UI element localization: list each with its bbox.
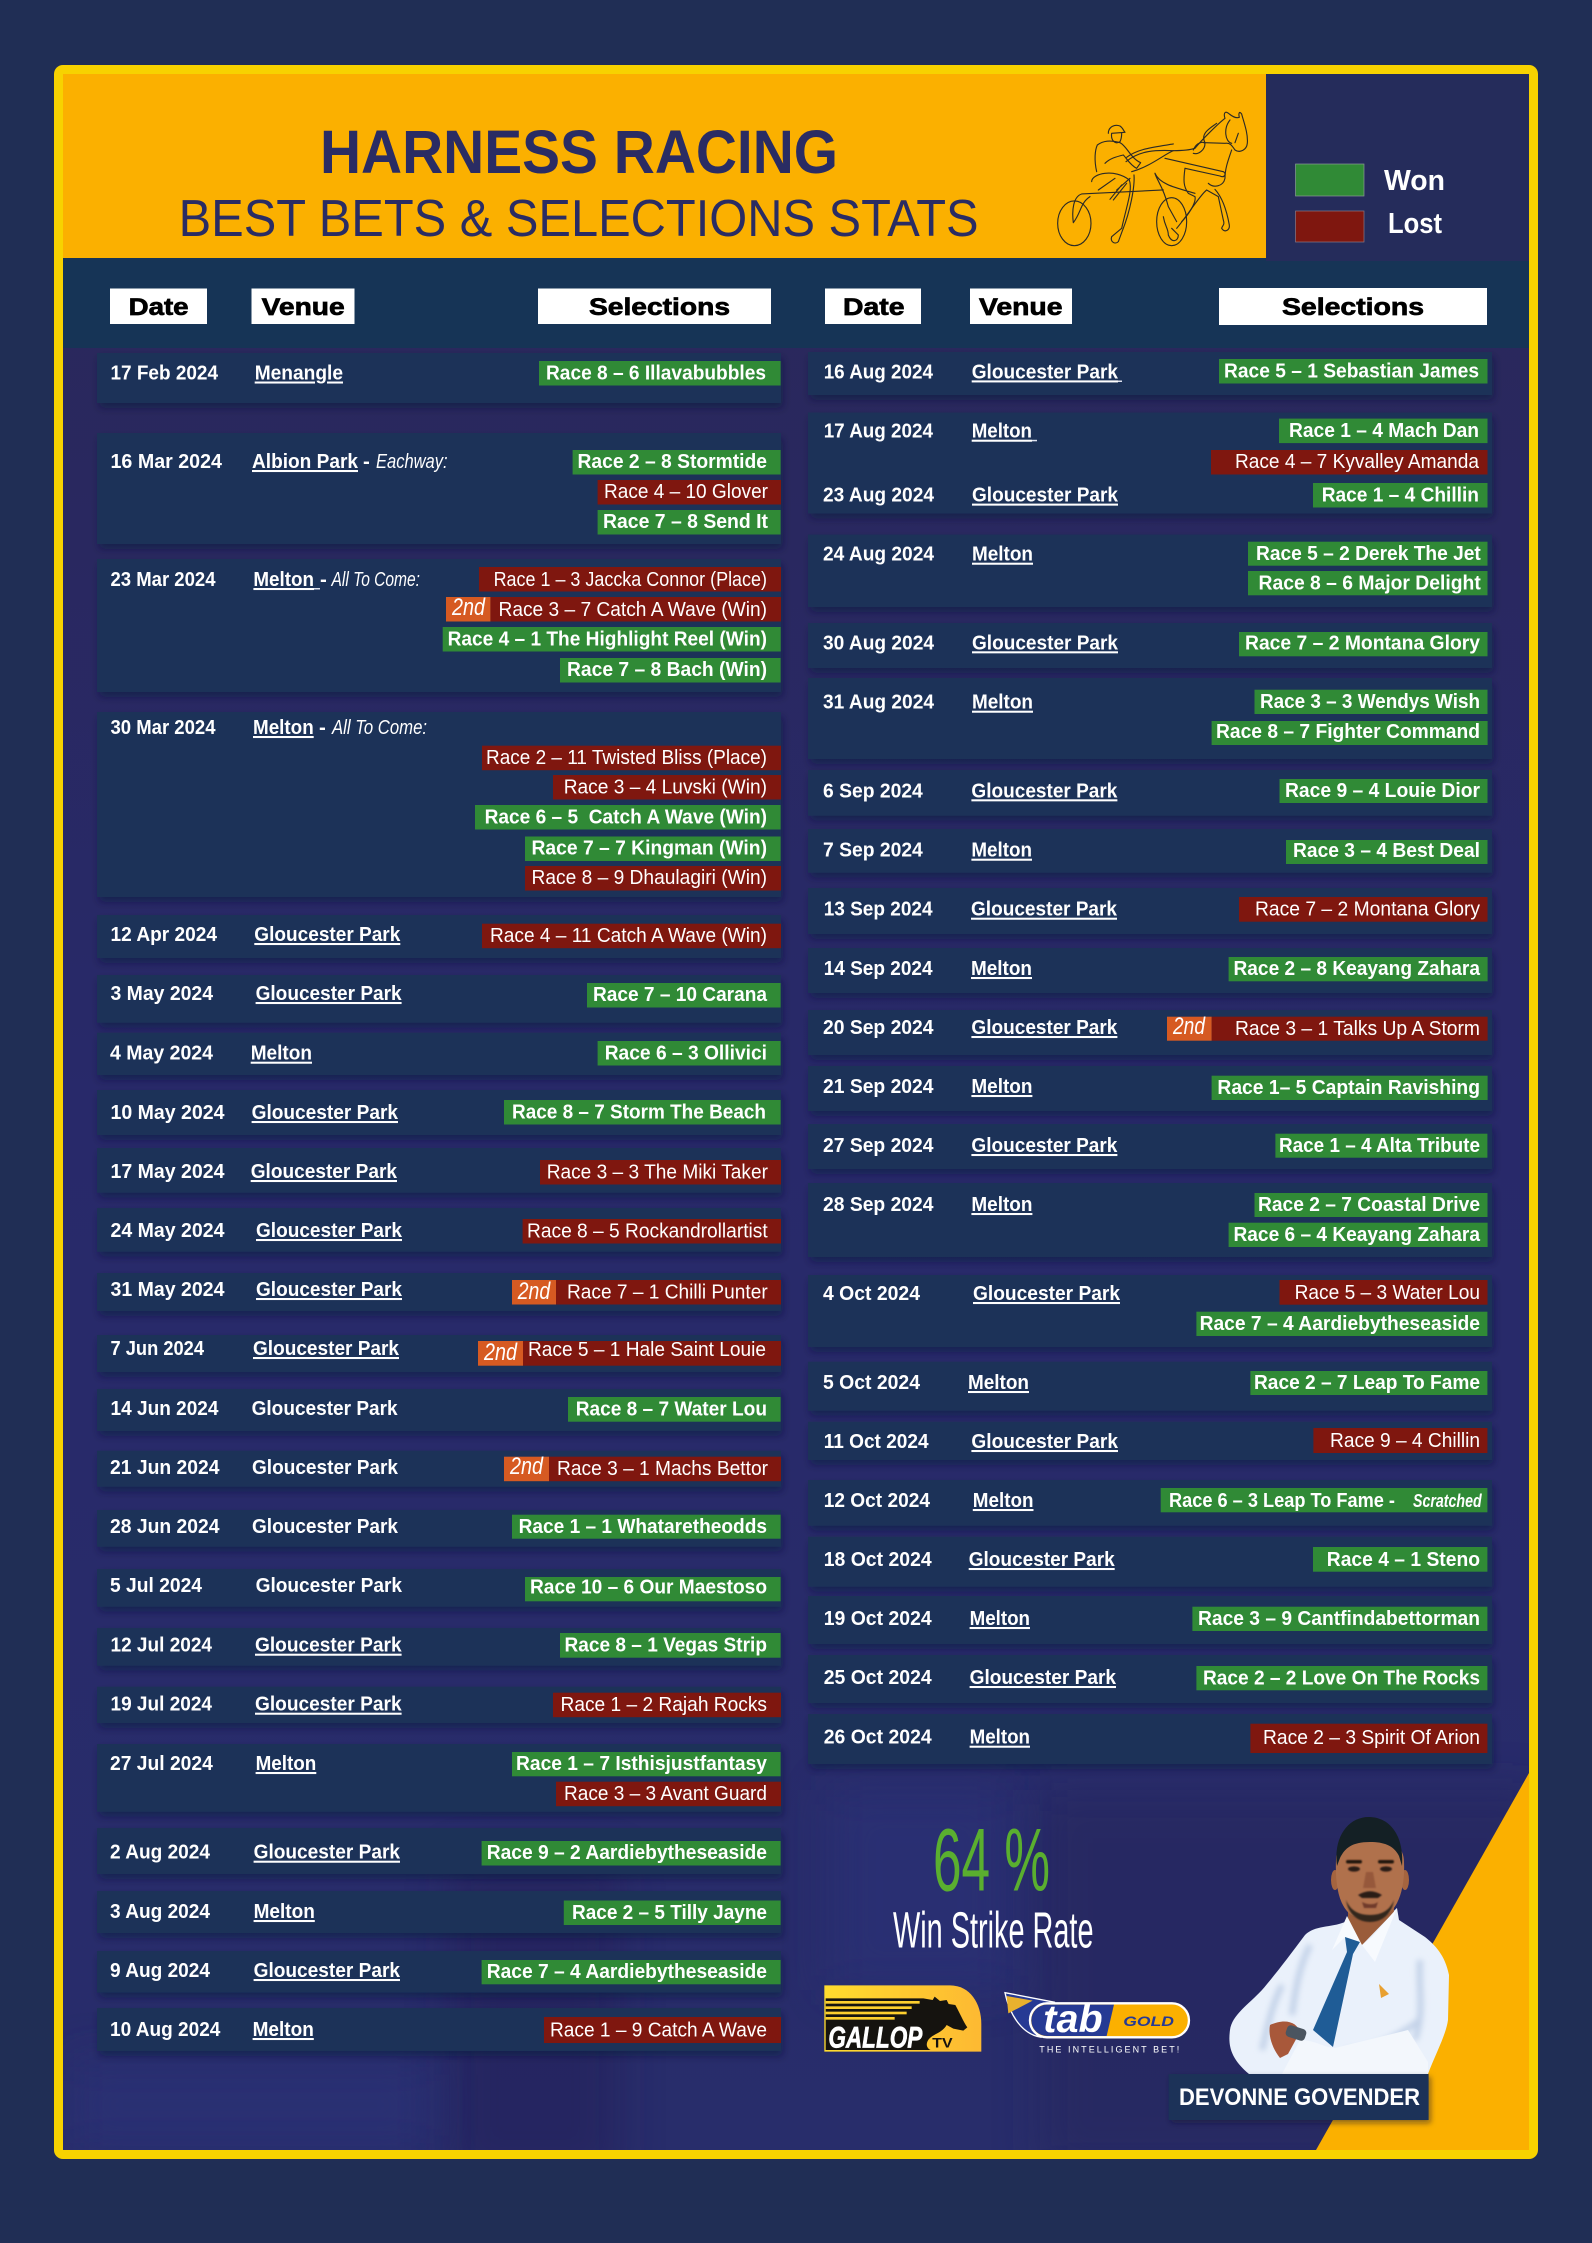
row: 31 Aug 2024 <box>808 678 1492 759</box>
row: 5 Oct 2024 <box>808 1362 1492 1411</box>
yellow corner wedge <box>1316 1773 1529 2150</box>
selection won: Race 8 – 7 Water Lou <box>576 1398 767 1420</box>
selection lost, 2nd: 2nd <box>451 594 486 621</box>
selection won: Race 7 – 8 Bach (Win) <box>567 658 767 681</box>
date: 13 Sep 2024 <box>824 898 933 921</box>
row: 17 May 2024 <box>97 1148 781 1193</box>
selection lost: Race 1 – 2 Rajah Rocks <box>560 1693 767 1716</box>
venue: Albion Park <box>252 450 359 473</box>
selection lost, 2nd <box>504 1453 781 1481</box>
venue: Melton <box>972 420 1032 443</box>
venue: Gloucester Park <box>971 779 1118 802</box>
row: 24 Aug 2024 <box>808 535 1492 607</box>
date: 27 Jul 2024 <box>110 1752 213 1775</box>
ears <box>1331 1870 1409 1890</box>
face <box>1336 1838 1404 1919</box>
row: 28 Jun 2024 <box>97 1510 781 1547</box>
selection won: Race 8 – 1 Vegas Strip <box>564 1634 767 1656</box>
selection won: Race 1– 5 Captain Ravishing <box>1217 1076 1480 1099</box>
row: 26 Oct 2024 <box>808 1714 1492 1764</box>
date: 28 Sep 2024 <box>823 1193 934 1216</box>
venue: Gloucester Park <box>972 360 1119 383</box>
logo: Gallop TV: TV <box>932 2034 953 2050</box>
date: 10 Aug 2024 <box>110 2018 221 2041</box>
selection won: Race 7 – 2 Montana Glory <box>1245 632 1481 654</box>
date: 28 Jun 2024 <box>110 1515 220 1538</box>
neck <box>1348 1898 1394 1945</box>
selection lost, 2nd: Race 3 – 7 Catch A Wave (Win) <box>498 598 767 621</box>
legend panel <box>1266 74 1529 260</box>
header: selections: Selections <box>589 294 730 321</box>
venue: Melton <box>253 716 314 739</box>
selection won: Race 2 – 7 Coastal Drive <box>1258 1193 1480 1216</box>
date: 12 Apr 2024 <box>110 923 218 946</box>
venue: Gloucester Park <box>254 1841 401 1864</box>
venue: All To Come: <box>330 716 427 739</box>
venue: Melton <box>968 1371 1029 1394</box>
row: 12 Oct 2024 <box>808 1480 1492 1526</box>
venue <box>253 716 427 739</box>
tie <box>1313 1937 1360 2047</box>
row: 3 May 2024 <box>97 975 781 1023</box>
header: date <box>110 288 207 324</box>
selection won: Race 2 – 7 Leap To Fame <box>1254 1371 1480 1394</box>
logo: TAB Gold: GOLD <box>1123 2013 1174 2029</box>
name plate: DEVONNE GOVENDER <box>1179 2084 1420 2111</box>
venue: Gloucester Park <box>256 1278 403 1301</box>
venue: Melton <box>971 1193 1032 1216</box>
selection won: Race 7 – 7 Kingman (Win) <box>532 836 767 860</box>
selection won: Race 1 – 1 Whataretheodds <box>519 1515 767 1538</box>
row: 27 Sep 2024 <box>808 1124 1492 1169</box>
row: 14 Jun 2024 <box>97 1389 781 1431</box>
venue: Gloucester Park <box>252 1397 398 1420</box>
selection lost, 2nd: Race 3 – 1 Talks Up A Storm <box>1235 1017 1480 1040</box>
row: 7 Jun 2024 <box>97 1335 781 1372</box>
date: 23 Aug 2024 <box>823 484 935 507</box>
venue: Gloucester Park <box>256 982 402 1005</box>
selection lost: Race 4 – 7 Kyvalley Amanda <box>1235 450 1480 473</box>
selection lost, 2nd <box>512 1278 781 1305</box>
row: 27 Jul 2024 <box>97 1744 781 1812</box>
selection lost, 2nd: Race 7 – 1 Chilli Punter <box>567 1280 768 1304</box>
selection lost: Race 4 – 11 Catch A Wave (Win) <box>490 924 767 947</box>
shirt folds <box>1262 1945 1421 2052</box>
header: selections right <box>1219 288 1487 325</box>
venue: Gloucester Park <box>971 1016 1118 1039</box>
portrait: Devonne Govender <box>1229 1817 1449 2074</box>
big percentage: 64 % <box>933 1810 1050 1910</box>
venue: Melton <box>254 1900 315 1923</box>
selection won: Race 1 – 7 Isthisjustfantasy <box>516 1752 768 1775</box>
row: 7 Sep 2024 <box>808 829 1492 873</box>
venue: Gloucester Park <box>252 1456 399 1479</box>
selection lost, 2nd: 2nd <box>517 1278 551 1305</box>
selection lost: Race 1 – 9 Catch A Wave <box>550 2018 767 2042</box>
row: 21 Sep 2024 <box>808 1066 1492 1111</box>
selection won: Race 1 – 4 Chillin <box>1322 484 1479 506</box>
selection won: Race 4 – 1 The Highlight Reel (Win) <box>448 628 767 650</box>
row: 17 Feb 2024 <box>97 353 781 403</box>
venue <box>252 450 448 473</box>
logo: Gallop TV <box>824 1985 981 2055</box>
venue: Gloucester Park <box>256 1219 403 1242</box>
row: 19 Jul 2024 <box>97 1687 781 1723</box>
date: 30 Aug 2024 <box>823 631 935 654</box>
row: 30 Mar 2024 <box>97 712 781 897</box>
row: 10 May 2024 <box>97 1090 781 1135</box>
logo: TAB Gold: THE INTELLIGENT BET! <box>1039 2045 1179 2055</box>
selection won: Race 10 – 6 Our Maestoso <box>530 1576 767 1598</box>
logo: Gallop TV: GALLOP <box>828 2022 923 2055</box>
selection won: Race 7 – 4 Aardiebytheseaside <box>1200 1312 1480 1335</box>
selection won: Race 7 – 8 Send It <box>603 510 768 533</box>
row: 12 Jul 2024 <box>97 1628 781 1666</box>
column header band <box>63 258 1529 348</box>
venue: Gloucester Park <box>973 1282 1121 1305</box>
date: 7 Jun 2024 <box>110 1337 205 1360</box>
venue: Gloucester Park <box>255 1693 402 1716</box>
features <box>1346 1860 1394 1922</box>
selection lost, 2nd: 2nd <box>509 1453 544 1480</box>
row: 4 Oct 2024 <box>808 1275 1492 1347</box>
selection won: Race 8 – 7 Storm The Beach <box>512 1100 766 1124</box>
venue: Gloucester Park <box>253 1337 400 1360</box>
header: venue right <box>970 288 1072 324</box>
row: 23 Mar 2024 <box>97 559 781 692</box>
selection lost, 2nd: 2nd <box>1172 1013 1206 1040</box>
selection lost: Race 8 – 9 Dhaulagiri (Win) <box>532 866 767 889</box>
venue <box>253 568 420 591</box>
selection won: Race 9 – 2 Aardiebytheseaside <box>487 1841 767 1864</box>
venue: Melton <box>253 2018 314 2041</box>
selection lost: Race 7 – 2 Montana Glory <box>1255 898 1481 920</box>
selection won, scratched: Race 6 – 3 Leap To Fame - <box>1169 1489 1395 1512</box>
row: 13 Sep 2024 <box>808 888 1492 934</box>
date: 31 May 2024 <box>110 1278 225 1301</box>
venue: Melton <box>971 839 1032 862</box>
watch <box>1285 2024 1307 2042</box>
date: 21 Jun 2024 <box>110 1456 220 1479</box>
selection won: Race 5 – 1 Sebastian James <box>1224 360 1479 382</box>
date: 12 Jul 2024 <box>110 1634 213 1657</box>
selection won, scratched: Scratched <box>1413 1491 1482 1511</box>
selection lost: Race 8 – 5 Rockandrollartist <box>527 1220 768 1242</box>
date: 14 Jun 2024 <box>110 1397 219 1420</box>
row: 2 Aug 2024 <box>97 1828 781 1874</box>
venue: Gloucester Park <box>252 1101 399 1124</box>
venue: Melton <box>970 1607 1030 1630</box>
selection lost: Race 1 – 3 Jaccka Connor (Place) <box>494 568 767 591</box>
selection won: Race 3 – 9 Cantfindabettorman <box>1198 1607 1480 1630</box>
row: 16 Aug 2024 <box>808 352 1492 395</box>
venue: Gloucester Park <box>972 484 1119 507</box>
selection lost, 2nd: 2nd <box>483 1339 518 1366</box>
header: date right: Date <box>843 294 904 321</box>
selection lost: Race 9 – 4 Chillin <box>1330 1429 1480 1452</box>
venue: Gloucester Park <box>971 898 1118 921</box>
venue: Gloucester Park <box>256 1574 403 1597</box>
date: 5 Jul 2024 <box>110 1574 203 1597</box>
legend: won <box>1296 164 1445 197</box>
venue: Eachway: <box>376 450 448 473</box>
selection lost: Race 4 – 10 Glover <box>604 480 768 503</box>
date: 24 Aug 2024 <box>823 543 935 566</box>
row: 9 Aug 2024 <box>97 1951 781 1993</box>
selection won: Race 3 – 4 Best Deal <box>1293 839 1480 862</box>
selection lost, 2nd <box>478 1338 781 1366</box>
row: 16 Mar 2024 <box>97 433 781 544</box>
legend: lost <box>1296 208 1442 242</box>
row: 24 May 2024 <box>97 1208 781 1252</box>
row: 14 Sep 2024 <box>808 948 1492 993</box>
date: 3 Aug 2024 <box>110 1900 211 1923</box>
subtitle: BEST BETS & SELECTIONS STATS <box>179 190 979 248</box>
selection won: Race 1 – 4 Mach Dan <box>1289 419 1479 442</box>
venue: Melton <box>253 568 314 591</box>
venue: Melton <box>972 543 1033 566</box>
venue: Melton <box>971 957 1032 980</box>
selection lost: Race 5 – 3 Water Lou <box>1295 1281 1480 1304</box>
selection won: Race 4 – 1 Steno <box>1327 1548 1480 1571</box>
date: 19 Jul 2024 <box>110 1693 213 1716</box>
date: 26 Oct 2024 <box>824 1726 932 1749</box>
logo: TAB Gold <box>1005 1993 1189 2055</box>
venue: Melton <box>971 1075 1032 1098</box>
name plate <box>1169 2074 1429 2120</box>
row: 4 May 2024 <box>97 1033 781 1075</box>
date: 12 Oct 2024 <box>824 1489 931 1512</box>
selection won: Race 8 – 6 Illavabubbles <box>546 362 766 384</box>
header: date: Date <box>129 294 189 321</box>
stat label: Win Strike Rate <box>893 1902 1094 1958</box>
date: 5 Oct 2024 <box>823 1371 921 1394</box>
header: date right <box>825 288 921 324</box>
date: 31 Aug 2024 <box>823 691 935 714</box>
hand <box>1269 2021 1300 2058</box>
venue: Gloucester Park <box>254 1959 401 1982</box>
date: 18 Oct 2024 <box>824 1548 932 1571</box>
selection won: Race 9 – 4 Louie Dior <box>1285 779 1480 802</box>
hair <box>1336 1817 1402 1866</box>
row: 20 Sep 2024 <box>808 1010 1492 1055</box>
header: venue: Venue <box>262 294 345 321</box>
selection lost, 2nd <box>1167 1013 1488 1041</box>
selection won: Race 6 – 3 Ollivici <box>605 1042 767 1064</box>
legend: won: Won <box>1384 165 1445 197</box>
date: 9 Aug 2024 <box>110 1959 211 1982</box>
header: selections right: Selections <box>1282 294 1424 321</box>
selection won: Race 2 – 8 Stormtide <box>578 450 767 473</box>
row: 11 Oct 2024 <box>808 1422 1492 1460</box>
selection lost: Race 3 – 3 Avant Guard <box>564 1782 767 1805</box>
venue: Gloucester Park <box>970 1666 1117 1689</box>
row: 18 Oct 2024 <box>808 1537 1492 1587</box>
selection won: Race 8 – 7 Fighter Command <box>1216 720 1480 743</box>
row: 17 and 23 Aug 2024 <box>808 412 1492 514</box>
date: 7 Sep 2024 <box>823 839 923 862</box>
date: 30 Mar 2024 <box>110 716 216 739</box>
date: 16 Aug 2024 <box>824 360 934 383</box>
row: 6 Sep 2024 <box>808 770 1492 816</box>
selection won: Race 7 – 4 Aardiebytheseaside <box>487 1960 767 1983</box>
venue: Menangle <box>255 362 343 384</box>
date: 16 Mar 2024 <box>110 450 223 473</box>
venue: Melton <box>973 1489 1034 1512</box>
selection won: Race 3 – 3 Wendys Wish <box>1260 690 1480 713</box>
date: 20 Sep 2024 <box>823 1016 934 1039</box>
header: selections <box>538 288 771 324</box>
selection won: Race 2 – 5 Tilly Jayne <box>572 1901 767 1924</box>
selection won: Race 1 – 4 Alta Tribute <box>1279 1134 1480 1157</box>
venue: Gloucester Park <box>971 1134 1118 1157</box>
selection lost, 2nd: Race 3 – 1 Machs Bettor <box>557 1457 768 1480</box>
row: 21 Jun 2024 <box>97 1451 781 1487</box>
date: 10 May 2024 <box>110 1101 225 1124</box>
date: 6 Sep 2024 <box>823 779 923 802</box>
row: 30 Aug 2024 <box>808 623 1492 668</box>
date: 11 Oct 2024 <box>824 1430 929 1453</box>
date: 27 Sep 2024 <box>823 1134 934 1157</box>
shirt <box>1229 1908 1449 2074</box>
venue: Gloucester Park <box>251 1160 398 1183</box>
date: 24 May 2024 <box>110 1219 225 1242</box>
venue: Gloucester Park <box>254 923 401 946</box>
date: 17 Aug 2024 <box>824 420 934 443</box>
selection won: Race 5 – 2 Derek The Jet <box>1256 542 1481 565</box>
date: 2 Aug 2024 <box>110 1841 211 1864</box>
venue: Gloucester Park <box>969 1548 1115 1571</box>
collar <box>1332 1908 1397 1962</box>
shirt badge <box>1379 1984 1389 1998</box>
date: 17 May 2024 <box>110 1160 225 1183</box>
venue: Gloucester Park <box>972 631 1119 654</box>
row: 3 Aug 2024 <box>97 1891 781 1933</box>
date: 4 Oct 2024 <box>823 1282 921 1305</box>
header: venue right: Venue <box>979 294 1062 321</box>
venue: - <box>319 716 326 739</box>
venue: Melton <box>251 1042 312 1065</box>
row: 25 Oct 2024 <box>808 1655 1492 1703</box>
venue: Gloucester Park <box>971 1430 1119 1453</box>
date: 25 Oct 2024 <box>824 1666 932 1689</box>
row: 19 Oct 2024 <box>808 1596 1492 1644</box>
venue: All To Come: <box>330 568 420 591</box>
venue: Gloucester Park <box>255 1634 402 1657</box>
selection lost: Race 3 – 4 Luvski (Win) <box>564 776 767 798</box>
date: 3 May 2024 <box>110 982 214 1005</box>
date: 19 Oct 2024 <box>824 1607 932 1630</box>
venue: Melton <box>970 1726 1030 1749</box>
selection lost, 2nd <box>446 594 781 622</box>
selection lost: Race 2 – 3 Spirit Of Arion <box>1263 1726 1480 1749</box>
row: 28 Sep 2024 <box>808 1183 1492 1257</box>
venue: - <box>320 568 327 591</box>
icon: harness horse line art <box>1058 112 1247 246</box>
header: venue <box>252 288 354 324</box>
date: 14 Sep 2024 <box>824 957 933 980</box>
strike rate stat <box>893 1810 1094 1958</box>
row: 31 May 2024 <box>97 1273 781 1311</box>
selection won: Race 2 – 2 Love On The Rocks <box>1203 1666 1480 1690</box>
header: yellow title band <box>63 74 1266 258</box>
row: 10 Aug 2024 <box>97 2008 781 2051</box>
date: 23 Mar 2024 <box>110 568 216 591</box>
title: HARNESS RACING <box>320 118 838 186</box>
selection won: Race 2 – 8 Keayang Zahara <box>1234 957 1481 980</box>
crossed forearm <box>1282 2030 1428 2074</box>
date: 17 Feb 2024 <box>110 362 219 384</box>
row: 5 Jul 2024 <box>97 1569 781 1607</box>
row: 12 Apr 2024 <box>97 915 781 958</box>
date: 21 Sep 2024 <box>823 1075 934 1098</box>
selection won: Race 7 – 10 Carana <box>593 983 768 1006</box>
selection lost: Race 2 – 11 Twisted Bliss (Place) <box>486 746 767 769</box>
selection lost, 2nd: Race 5 – 1 Hale Saint Louie <box>528 1338 766 1361</box>
date: 4 May 2024 <box>110 1042 214 1065</box>
selection won: Race 8 – 6 Major Delight <box>1258 572 1481 594</box>
venue: - <box>363 450 370 473</box>
selection won: Race 6 – 5 Catch A Wave (Win) <box>485 806 767 828</box>
venue: Melton <box>972 691 1033 714</box>
venue: Gloucester Park <box>252 1515 399 1538</box>
venue: Melton <box>256 1752 316 1775</box>
selection won: Race 6 – 4 Keayang Zahara <box>1234 1223 1481 1246</box>
legend: lost: Lost <box>1388 208 1442 240</box>
logo: TAB Gold: tab <box>1043 1997 1103 2041</box>
selection lost: Race 3 – 3 The Miki Taker <box>547 1160 768 1184</box>
